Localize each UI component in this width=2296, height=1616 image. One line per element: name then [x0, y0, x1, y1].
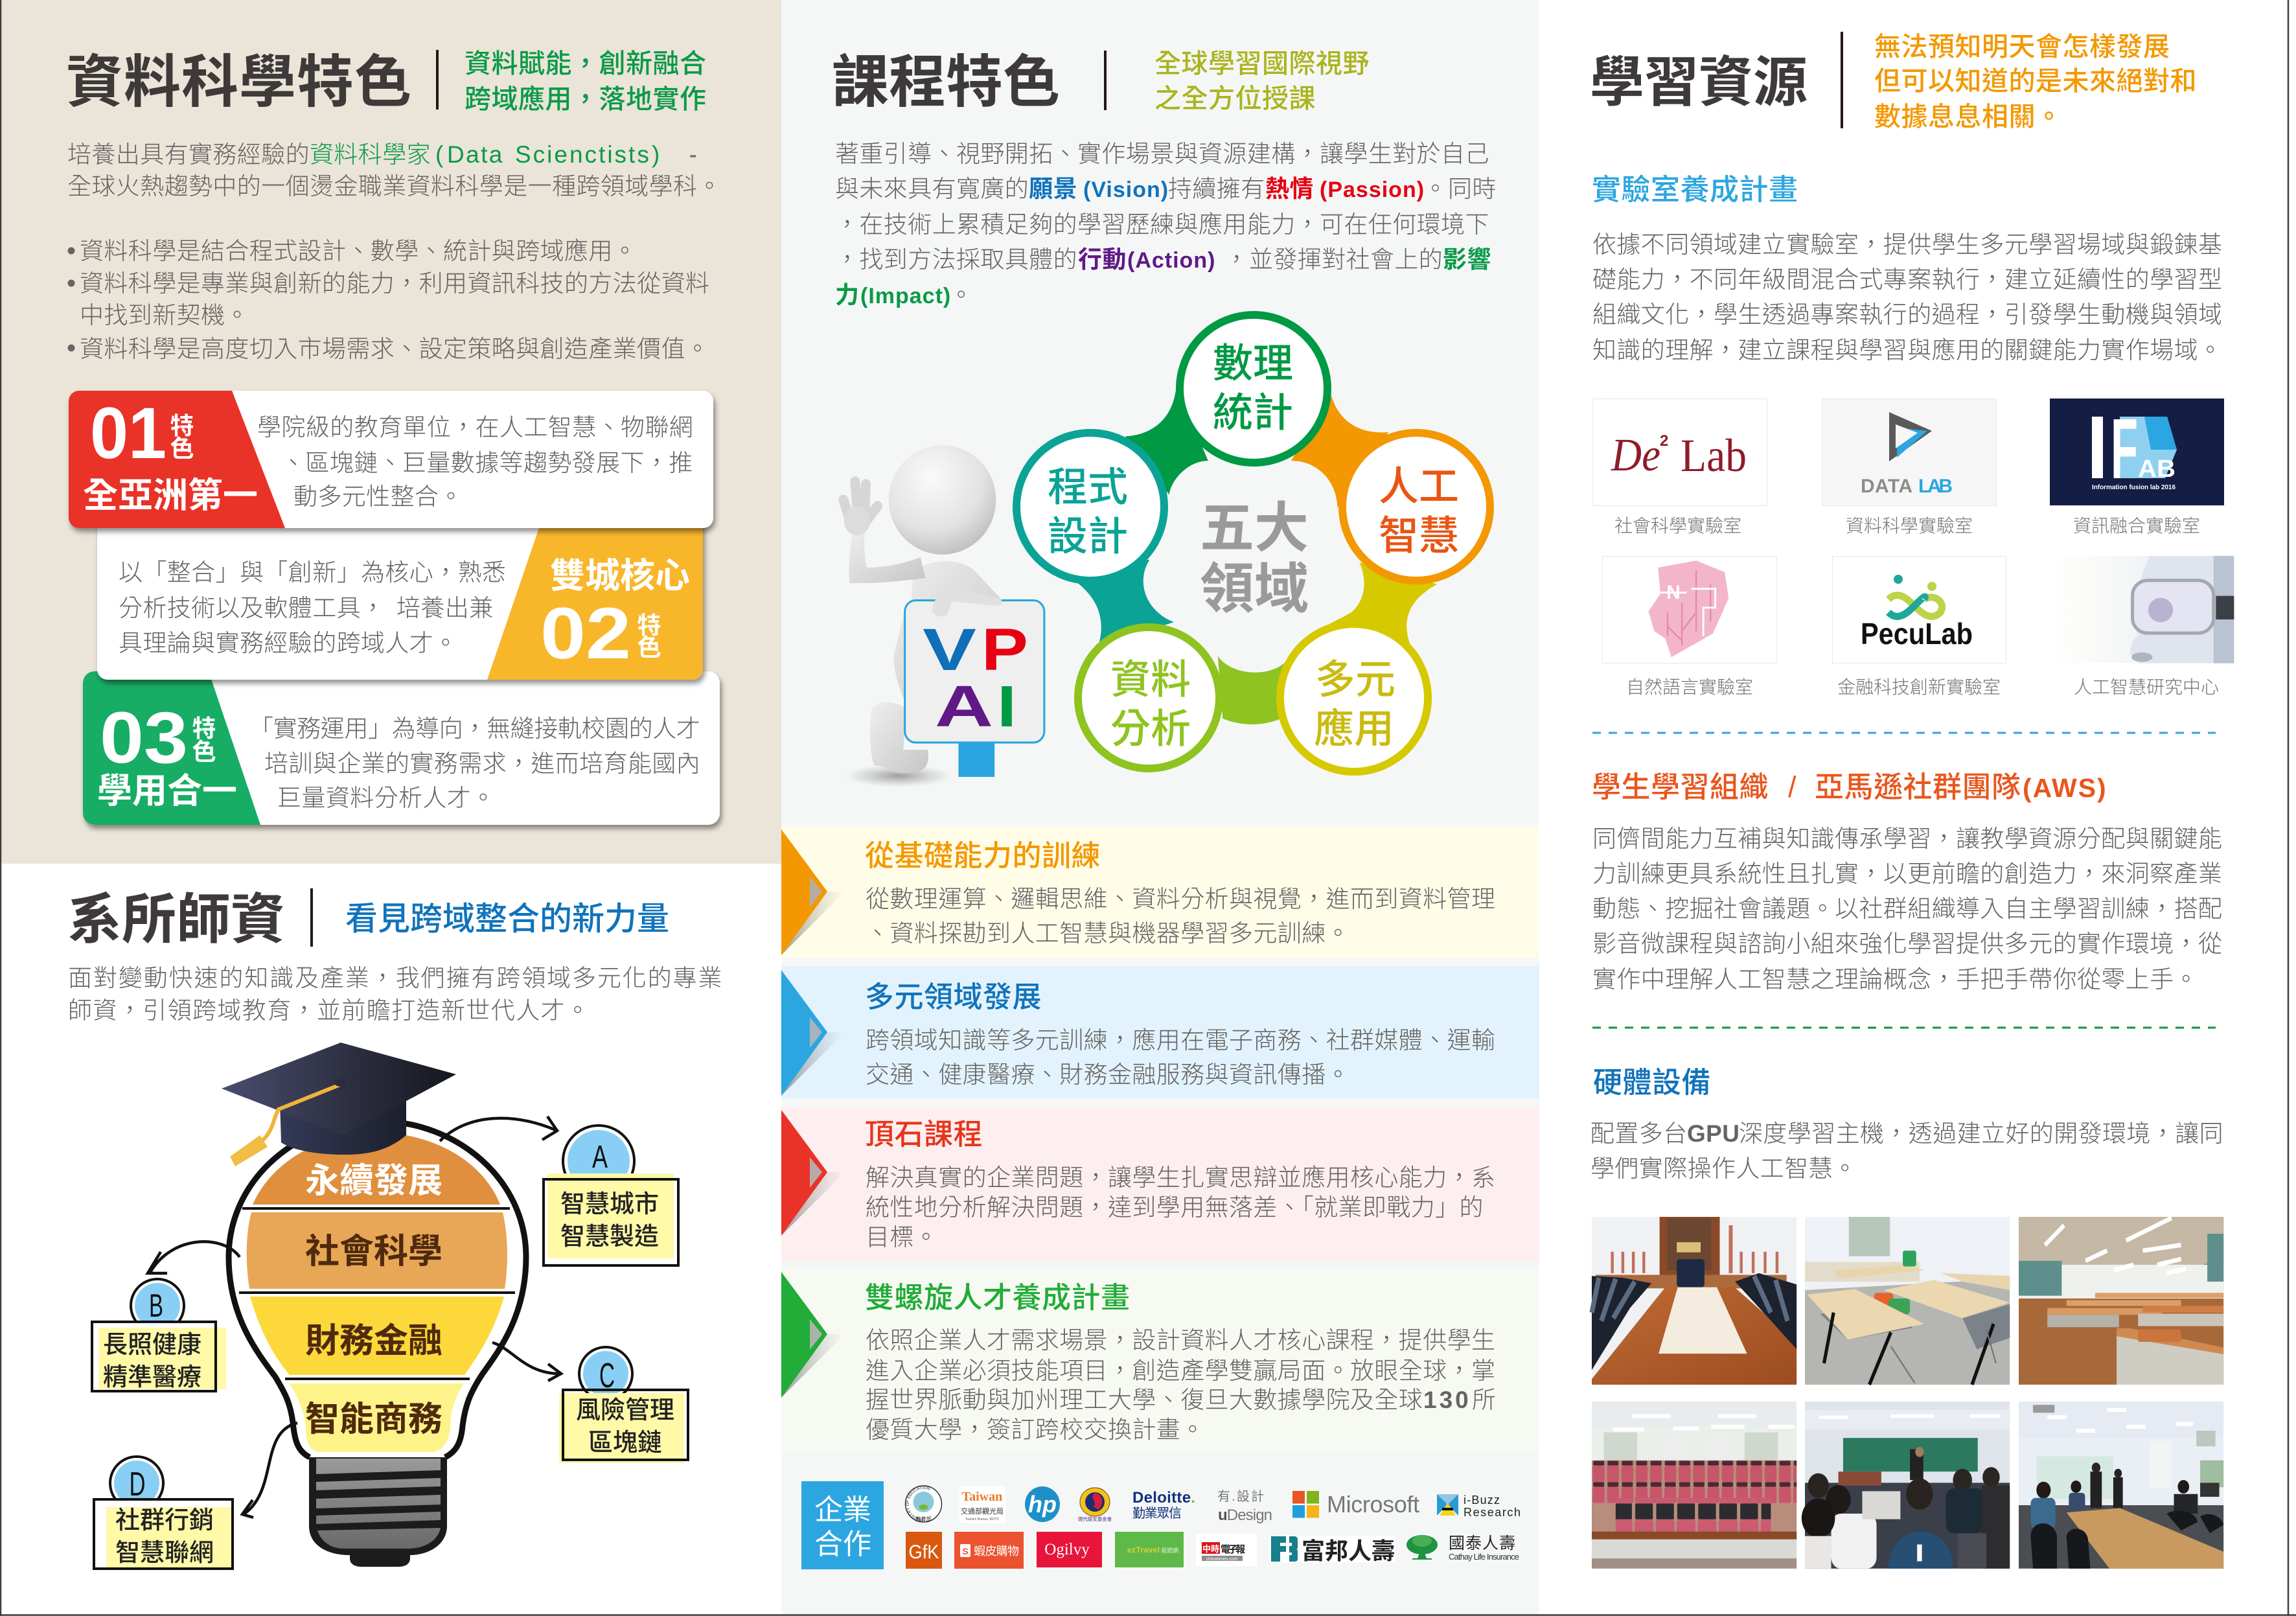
curriculum paragraph: 影響	[1443, 246, 1491, 273]
intro paragraph: )	[652, 141, 660, 168]
arrow to A	[440, 1116, 557, 1141]
intro paragraph: -	[682, 141, 697, 168]
logo: ministry of education: 教育部	[916, 1516, 932, 1522]
domain: programming: 設計	[1048, 514, 1128, 559]
logo: uDesign: uDesign	[1218, 1506, 1272, 1524]
labs paragraph	[1592, 231, 2222, 364]
badge B: 長照健康	[103, 1332, 201, 1359]
band: diverse domains: 多元領域發展	[865, 980, 1042, 1013]
band labels: 社會科學	[305, 1232, 442, 1271]
graduation cap	[222, 1043, 456, 1166]
center label	[1200, 498, 1309, 619]
lab: NLP: 自然語言實驗室	[1626, 677, 1753, 697]
section heading: student learning org: 亞馬遜社群團隊	[1815, 770, 2021, 803]
card 02: 具理論與實務經驗的跨域人才。	[119, 630, 458, 656]
curriculum paragraph: (Vision)	[1083, 178, 1169, 202]
subtitle: empowerment: 跨域應用，落地實作	[465, 84, 706, 114]
arrow to C	[492, 1343, 561, 1381]
band: capstone: 統性地分析解決問題，達到學用無落差、「就業即戰力」的	[866, 1194, 1484, 1221]
heading: learning resources: 學習資源	[1590, 52, 1808, 113]
badge D: 社群行銷	[115, 1507, 214, 1534]
labs paragraph: 知識的理解，建立課程與學習與應用的關鍵能力實作場域。	[1592, 337, 2222, 364]
lab: Information Fusion Lab: F	[2111, 401, 2138, 496]
domain: data analysis: 資料	[1110, 658, 1191, 702]
band: double helix talent plan: 所	[1472, 1387, 1496, 1413]
badge B: B	[149, 1287, 163, 1324]
card 01: 01	[90, 393, 166, 474]
logo: HP	[1025, 1486, 1060, 1522]
logo: uDesign	[1217, 1489, 1272, 1524]
badge D: 智慧聯網	[115, 1540, 214, 1567]
heading divider	[436, 50, 439, 110]
curriculum paragraph: 。	[949, 282, 973, 308]
curriculum paragraph	[835, 141, 1497, 308]
band: double helix talent plan: 握世界脈動與加州理工大學、復旦大數據學院及全球	[866, 1387, 1423, 1413]
student org paragraph: 力訓練更具系統性且扎實，以更前瞻的創造力，來洞察產業	[1592, 860, 2222, 887]
band: double helix talent plan: 依照企業人才需求場景，設計資料人才核心課程，提供學生	[866, 1327, 1495, 1354]
badge B: 精準醫療	[103, 1364, 201, 1391]
curriculum paragraph: 行動	[1078, 246, 1127, 273]
photo: auditorium	[1592, 1402, 1797, 1569]
badge C	[559, 1347, 688, 1463]
student org paragraph: 實作中理解人工智慧之理論概念，手把手帶你從零上手。	[1592, 966, 2198, 993]
card 03: 03	[100, 697, 188, 778]
partners label: 企業	[814, 1494, 871, 1526]
section heading: hardware: 硬體設備	[1593, 1066, 1711, 1099]
center label: 領域	[1200, 559, 1309, 619]
band: diverse domains: 交通、健康醫療、財務金融服務與資訊傳播。	[866, 1061, 1350, 1088]
logo: Deloitte: 勤業眾信	[1132, 1506, 1182, 1521]
curriculum paragraph: ，	[1224, 246, 1248, 273]
five domains flower diagram	[1016, 315, 1490, 772]
section heading: labs: 實驗室養成計畫	[1592, 173, 1798, 206]
lab: De2 Lab: 社會科學實驗室	[1614, 516, 1741, 536]
card 01: 色	[170, 435, 194, 462]
logo: ezTravel: ezTravel	[1127, 1545, 1160, 1554]
logo: GfK	[906, 1532, 942, 1569]
hardware paragraph: 學們實際操作人工智慧。	[1590, 1155, 1857, 1182]
photo: lecture with blackboard	[1802, 1402, 2010, 1569]
intro paragraph	[67, 141, 722, 200]
lab: Data Lab: 資料科學實驗室	[1846, 516, 1973, 536]
badge C: 區塊鏈	[588, 1429, 662, 1457]
logo: Cathay Life	[1406, 1534, 1519, 1562]
logo: chinatimes	[1196, 1534, 1257, 1566]
card 02: 色	[637, 634, 661, 661]
partners label	[801, 1481, 884, 1569]
hardware paragraph	[1590, 1120, 2223, 1182]
lab: De2 Lab: De	[1611, 429, 1660, 481]
faculty paragraph: 師資，引領跨域教育，並前瞻打造新世代人才。	[68, 997, 590, 1024]
band labels	[305, 1162, 442, 1438]
divider	[1592, 1026, 2216, 1029]
center label: 五大	[1200, 498, 1309, 559]
logo: uDesign: 有.設計	[1217, 1489, 1264, 1504]
card 03: 「實務運用」為導向，無縫接軌校園的人才	[249, 715, 700, 742]
band: diverse domains	[781, 966, 1539, 1098]
card 02: 以「整合」與「創新」為核心，熟悉	[119, 559, 506, 586]
lab: Information Fusion Lab	[2050, 398, 2224, 536]
panel: faculty	[67, 888, 723, 1570]
student org paragraph: 動態、挖掘社會議題。以社群組織導入自主學習訓練，搭配	[1592, 895, 2222, 922]
card 03: 培訓與企業的實務需求，進而培育能國內	[264, 750, 700, 777]
bullet list: 中找到新契機。	[80, 302, 249, 329]
badge B	[91, 1279, 226, 1392]
card 02	[97, 512, 703, 680]
band: capstone	[781, 1107, 1539, 1262]
band labels: 財務金融	[305, 1322, 442, 1360]
card 02: 分析技術以及軟體工具，	[119, 595, 385, 621]
card 01	[69, 391, 713, 528]
lab: AI research centre: 人工智慧研究中心	[2074, 677, 2219, 697]
lab: Data Lab: DATA	[1861, 476, 1912, 497]
band: capstone: 解決真實的企業問題，讓學生扎實思辯並應用核心能力，系	[866, 1164, 1495, 1191]
light bulb diagram	[222, 1043, 526, 1567]
badge D	[93, 1457, 234, 1570]
lab: PecuLab	[1832, 556, 2006, 697]
badge A	[542, 1125, 680, 1267]
lab: AI research centre	[2060, 556, 2234, 697]
curriculum paragraph: 。	[1423, 176, 1447, 202]
logo: Cathay Life: Cathay Life Insurance	[1449, 1552, 1519, 1562]
intro paragraph: Data	[447, 141, 504, 168]
badge D: D	[130, 1466, 145, 1503]
section heading: student learning org: /	[1788, 770, 1797, 803]
lab: Information Fusion Lab: AB	[2138, 456, 2175, 483]
domain: programming: 程式	[1048, 465, 1128, 510]
logo: Taiwan tourism: Tourism Bureau, MOTC	[965, 1518, 1000, 1521]
partners label: 合作	[814, 1529, 871, 1560]
band: diverse domains: 跨領域知識等多元訓練，應用在電子商務、社群媒體、運輸	[866, 1027, 1495, 1054]
domain: AI	[1342, 433, 1490, 581]
panel: learning resources	[1590, 32, 2234, 1569]
domain: applications: 應用	[1314, 707, 1394, 752]
panel: curriculum	[781, 0, 1539, 1614]
subtitle: future: 但可以知道的是未來絕對和	[1874, 66, 2197, 96]
badge A: 智慧製造	[560, 1223, 659, 1251]
logo: chinatimes: chinatimes.com	[1206, 1557, 1237, 1562]
curriculum paragraph: 熱情	[1265, 176, 1314, 202]
subtitle: empowerment: 資料賦能，創新融合	[465, 49, 706, 78]
subtitle: empowerment	[465, 49, 706, 114]
band: foundation training: 從基礎能力的訓練	[865, 839, 1101, 872]
bullet list: 資料科學是結合程式設計、數學、統計與跨域應用。	[80, 238, 637, 264]
band: capstone: 頂石課程	[865, 1118, 983, 1151]
logo: Fubon Life	[1269, 1536, 1395, 1564]
subtitle: global learning	[1154, 49, 1370, 113]
heading divider	[1841, 32, 1843, 128]
panel: data science features	[0, 0, 781, 864]
logo: modern women's foundation: 現代婦女基金會	[1078, 1516, 1112, 1522]
divider	[1592, 732, 2216, 733]
card 03	[83, 671, 720, 825]
logo: Cathay Life: 國泰人壽	[1449, 1534, 1515, 1553]
bullet list	[67, 238, 709, 362]
lab: Data Lab	[1822, 399, 1997, 536]
curriculum paragraph: 著重引導、視野開拓、實作場景與資源建構，讓學生對於自己	[835, 141, 1489, 167]
logo: Ogilvy: Ogilvy	[1044, 1541, 1090, 1558]
logo: GfK: GfK	[908, 1541, 939, 1563]
card 02: 02	[540, 593, 631, 674]
badge C: 風險管理	[576, 1397, 674, 1424]
intro paragraph: Scienctists	[515, 141, 651, 168]
domain: data analysis	[1078, 627, 1219, 768]
logo: ezTravel: 易遊網	[1161, 1547, 1178, 1554]
character holding VPAI sign: A	[935, 675, 993, 739]
logo: HP: hp	[1028, 1491, 1057, 1518]
student org paragraph: 同儕間能力互補與知識傳承學習，讓教學資源分配與關鍵能	[1592, 825, 2222, 852]
band: double helix talent plan: 優質大學，簽訂跨校交換計畫。	[866, 1416, 1205, 1443]
logo: chinatimes: 電子報	[1221, 1544, 1245, 1555]
band: foundation training: 、資料探勘到人工智慧與機器學習多元訓練。	[866, 920, 1350, 947]
intro paragraph: 培養出具有實務經驗的資料科學家	[67, 141, 431, 168]
labs paragraph: 組織文化，學生透過專案執行的過程，引發學生動機與領域	[1592, 301, 2222, 328]
arrow to B	[148, 1241, 240, 1273]
logo: Fubon Life: 富邦人壽	[1302, 1538, 1395, 1564]
subtitle: future	[1874, 32, 2197, 132]
lab: De2 Lab: Lab	[1681, 430, 1747, 481]
logo: modern women's foundation	[1078, 1488, 1112, 1522]
logo: i-Buzz Research: i-Buzz	[1464, 1494, 1500, 1506]
student org paragraph: 影音微課程與諮詢小組來強化學習提供多元的實作環境，從	[1592, 930, 2222, 957]
logo: ministry of education: MINISTRY OF EDUCATION	[906, 1486, 930, 1521]
curriculum paragraph: (Passion)	[1320, 178, 1425, 202]
logo: Shopee	[954, 1532, 1024, 1569]
band: capstone: 目標。	[866, 1224, 938, 1251]
logo: Shopee: 蝦皮購物	[974, 1545, 1019, 1558]
subtitle: future: 數據息息相關。	[1874, 102, 2063, 132]
logo: Ogilvy	[1037, 1532, 1102, 1567]
card 03: 巨量資料分析人才。	[277, 785, 496, 811]
logo: ministry of education	[904, 1485, 942, 1523]
band: double helix talent plan: 進入企業必須技能項目，創造產學雙贏局面。放眼全球，掌	[866, 1357, 1495, 1384]
photo: lecture hall	[2019, 1217, 2223, 1385]
badge A: 智慧城市	[560, 1191, 659, 1218]
bulb screw base	[309, 1457, 447, 1567]
card 02: 特	[637, 612, 661, 639]
lab: Information Fusion Lab: 資訊融合實驗室	[2073, 516, 2200, 536]
photo: meeting room	[1592, 1217, 1797, 1385]
band: double helix talent plan	[781, 1269, 1539, 1453]
domain: data analysis: 分析	[1110, 707, 1191, 752]
lab: Data Lab: LAB	[1918, 476, 1953, 497]
curriculum paragraph: 同時	[1448, 176, 1497, 202]
band: double helix talent plan: 雙螺旋人才養成計畫	[865, 1281, 1131, 1314]
logo: chinatimes: 中時	[1202, 1544, 1219, 1554]
logo: Shopee: S	[962, 1546, 969, 1556]
curriculum paragraph: 並發揮對社會上的	[1249, 246, 1443, 273]
domain: programming	[1016, 433, 1164, 581]
domain: applications	[1280, 624, 1428, 772]
hardware paragraph: 配置多台	[1590, 1120, 1688, 1147]
lab: De2 Lab	[1592, 399, 1767, 536]
card 01: 、區塊鏈、巨量數據等趨勢發展下，推	[281, 450, 693, 476]
badge A: A	[592, 1140, 608, 1175]
logo: Taiwan tourism	[959, 1486, 1005, 1523]
domain: math and statistics: 統計	[1213, 391, 1293, 435]
curriculum paragraph: (Action)	[1127, 248, 1215, 273]
heading: curriculum: 課程特色	[832, 50, 1060, 114]
domain: AI: 人工	[1379, 465, 1459, 509]
lab: NLP: N	[1666, 582, 1681, 603]
band: foundation training: 從數理運算、邏輯思維、資料分析與視覺，進而到資料管理	[866, 886, 1495, 912]
band labels: 永續發展	[305, 1162, 442, 1200]
card 01: 學院級的教育單位，在人工智慧、物聯網	[257, 414, 693, 441]
character holding VPAI sign: P	[982, 617, 1028, 683]
character holding VPAI sign: I	[997, 675, 1016, 739]
intro paragraph: (	[435, 141, 444, 168]
lab: Information Fusion Lab: Information fusion lab 2016	[2092, 484, 2175, 491]
labs paragraph: 礎能力，不同年級間混合式專案執行，建立延續性的學習型	[1592, 266, 2222, 293]
logo: Microsoft: Microsoft	[1327, 1491, 1419, 1518]
card 01: 動多元性整合。	[293, 483, 463, 510]
intro paragraph: 全球火熱趨勢中的一個燙金職業資料科學是一種跨領域學科。	[67, 173, 722, 200]
lab: De2 Lab: 2	[1660, 432, 1668, 450]
card 03: 特	[192, 715, 216, 742]
logo: Deloitte: Deloitte.	[1132, 1489, 1195, 1506]
photo: classroom	[1805, 1217, 2010, 1385]
faculty paragraph: 面對變動快速的知識及產業，我們擁有跨領域多元化的專業	[68, 965, 723, 991]
logo: ezTravel	[1115, 1532, 1184, 1567]
domain: math and statistics: 數理	[1213, 341, 1293, 386]
badge C: C	[599, 1356, 615, 1395]
domain: math and statistics	[1180, 315, 1327, 463]
bullet list: 資料科學是專業與創新的能力，利用資訊科技的方法從資料	[80, 270, 709, 297]
heading divider	[1104, 51, 1107, 110]
band: double helix talent plan: 130	[1423, 1387, 1471, 1413]
logo: Taiwan tourism: Taiwan	[962, 1490, 1002, 1504]
card 01: 全亞洲第一	[83, 476, 258, 515]
hardware paragraph: GPU	[1687, 1120, 1739, 1147]
bullet list: 資料科學是高度切入市場需求、設定策略與創造產業價值。	[80, 336, 709, 362]
subtitle: global learning: 全球學習國際視野	[1154, 49, 1370, 78]
enterprise partners	[801, 1481, 1521, 1569]
card 02: 雙城核心	[550, 557, 690, 595]
card 02: 培養出兼	[396, 595, 494, 621]
logo: i-Buzz Research	[1437, 1494, 1521, 1519]
logo: Taiwan tourism: 交通部觀光局	[961, 1506, 1004, 1516]
heading: data science features: 資料科學特色	[66, 50, 412, 114]
lab: PecuLab: 金融科技創新實驗室	[1837, 677, 2001, 697]
domain: applications: 多元	[1315, 658, 1395, 702]
heading divider	[310, 888, 313, 947]
logo: Deloitte	[1132, 1489, 1195, 1521]
curriculum paragraph: 力	[835, 282, 859, 308]
arrow to D	[242, 1423, 297, 1518]
character holding VPAI sign	[844, 445, 1044, 787]
curriculum paragraph: (Impact)	[860, 284, 951, 308]
curriculum paragraph: 持續擁有	[1168, 176, 1265, 202]
hardware paragraph: 深度學習主機，透過建立好的開發環境，讓同	[1739, 1120, 2223, 1147]
card 01: 特	[170, 413, 194, 439]
subtitle: future: 無法預知明天會怎樣發展	[1874, 32, 2170, 62]
card 03: 學用合一	[97, 772, 237, 811]
faculty paragraph	[68, 965, 723, 1024]
labs paragraph: 依據不同領域建立實驗室，提供學生多元學習場域與鍛鍊基	[1592, 231, 2222, 258]
lab: PecuLab: PecuLab	[1861, 617, 1973, 651]
section heading: student learning org: 學生學習組織	[1592, 770, 1769, 803]
card 03: 色	[192, 739, 216, 765]
photo: computer classroom	[2019, 1402, 2223, 1569]
character holding VPAI sign: V	[923, 617, 976, 683]
section heading: student learning org: (AWS)	[2023, 773, 2107, 803]
curriculum paragraph: 與未來具有寬廣的願景	[835, 176, 1077, 202]
curriculum paragraph: ，在技術上累積足夠的學習歷練與應用能力，可在任何環境下	[835, 211, 1489, 238]
band: foundation training	[781, 825, 1539, 958]
subtitle: faculty: 看見跨域整合的新力量	[345, 901, 669, 937]
student org paragraph	[1592, 825, 2222, 993]
lab: NLP	[1603, 556, 1776, 697]
subtitle: global learning: 之全方位授課	[1154, 84, 1316, 113]
logo: i-Buzz Research: Research	[1464, 1506, 1521, 1519]
band labels: 智能商務	[305, 1400, 442, 1438]
domain: AI: 智慧	[1379, 514, 1459, 559]
heading: faculty: 系所師資	[67, 889, 285, 950]
curriculum paragraph: ，找到方法採取具體的	[835, 246, 1077, 273]
